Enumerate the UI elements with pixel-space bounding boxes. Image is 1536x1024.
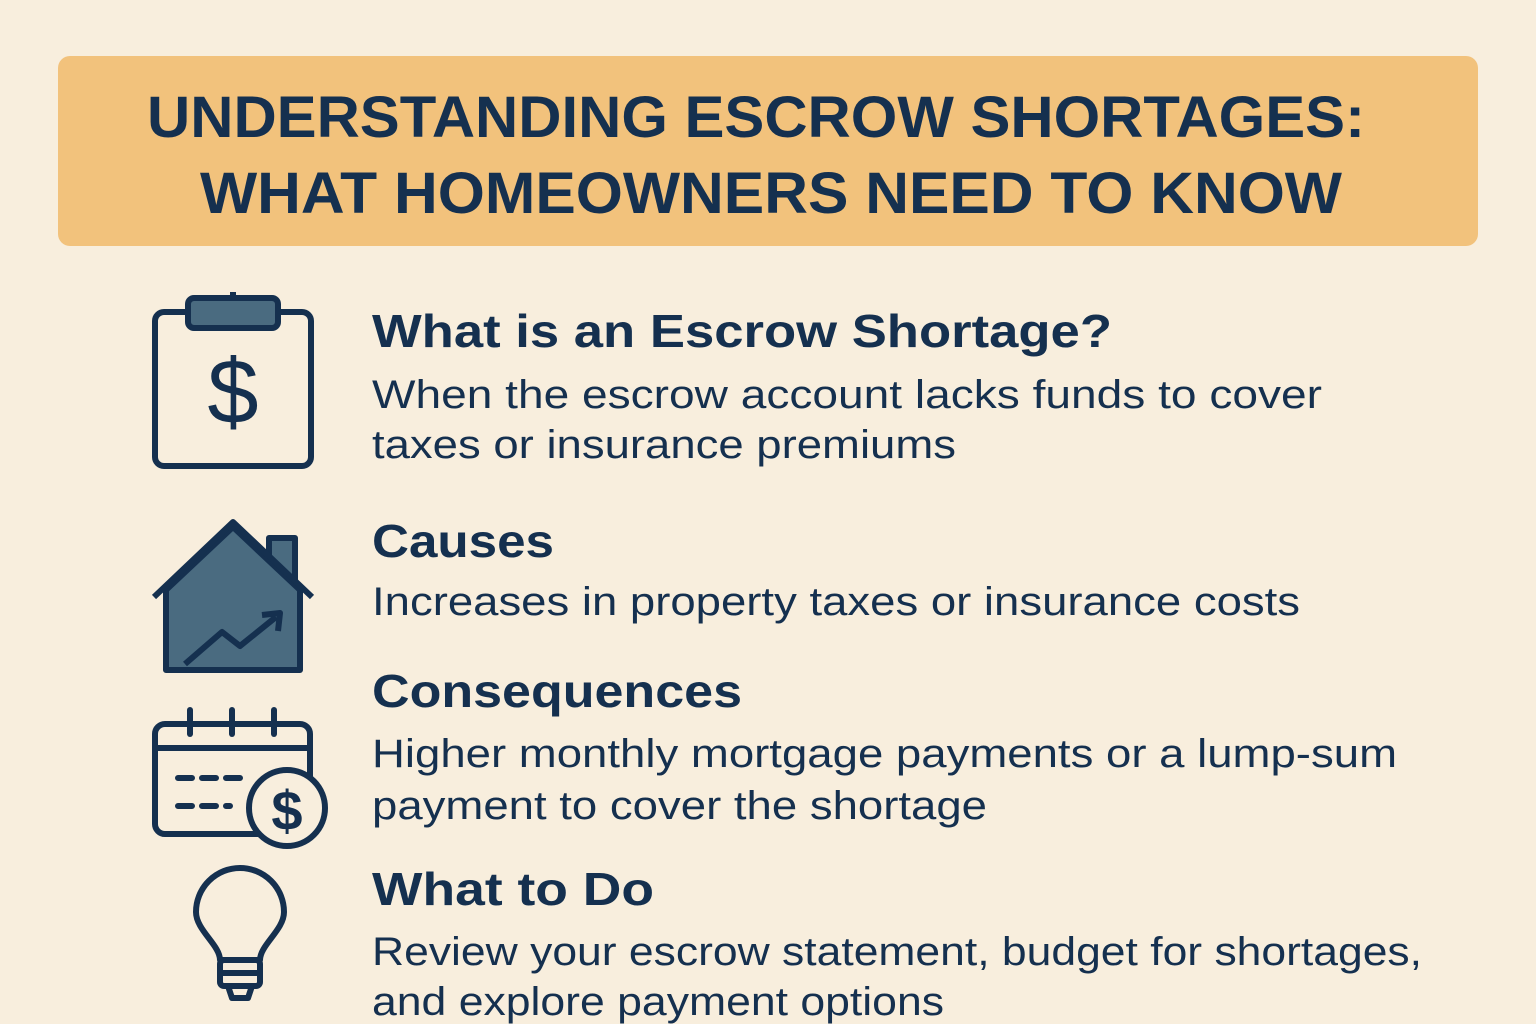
section: consequences [372, 665, 1397, 828]
title banner [58, 56, 1478, 246]
section: causes: Increases in property taxes or insurance costs [372, 580, 1300, 624]
section: consequences: Consequences [372, 665, 742, 717]
section: what is [372, 305, 1322, 467]
title banner: UNDERSTANDING ESCROW SHORTAGES: [147, 85, 1365, 150]
section: what is: When the escrow account lacks funds to cover [372, 373, 1322, 417]
section: causes [372, 515, 1300, 624]
icon: calendar with coin: $ [271, 779, 303, 842]
section: consequences: Higher monthly mortgage payments or a lump-sum [372, 732, 1397, 776]
title banner: WHAT HOMEOWNERS NEED TO KNOW [200, 161, 1342, 226]
section: causes: Causes [372, 515, 554, 567]
section: what to do: Review your escrow statement, budget for shortages, [372, 930, 1422, 974]
section: what to do [372, 863, 1422, 1024]
icon: clipboard with dollar: $ [207, 341, 259, 443]
icon: light bulb [196, 868, 284, 998]
section: what is: What is an Escrow Shortage? [372, 305, 1112, 357]
section: consequences: payment to cover the shortage [372, 784, 987, 828]
section: what is: taxes or insurance premiums [372, 423, 956, 467]
icon: clipboard with dollar [155, 292, 311, 466]
icon: calendar with coin [155, 710, 325, 846]
section: what to do: and explore payment options [372, 980, 944, 1024]
icon: house with rising arrow [154, 522, 312, 670]
section: what to do: What to Do [372, 863, 654, 915]
